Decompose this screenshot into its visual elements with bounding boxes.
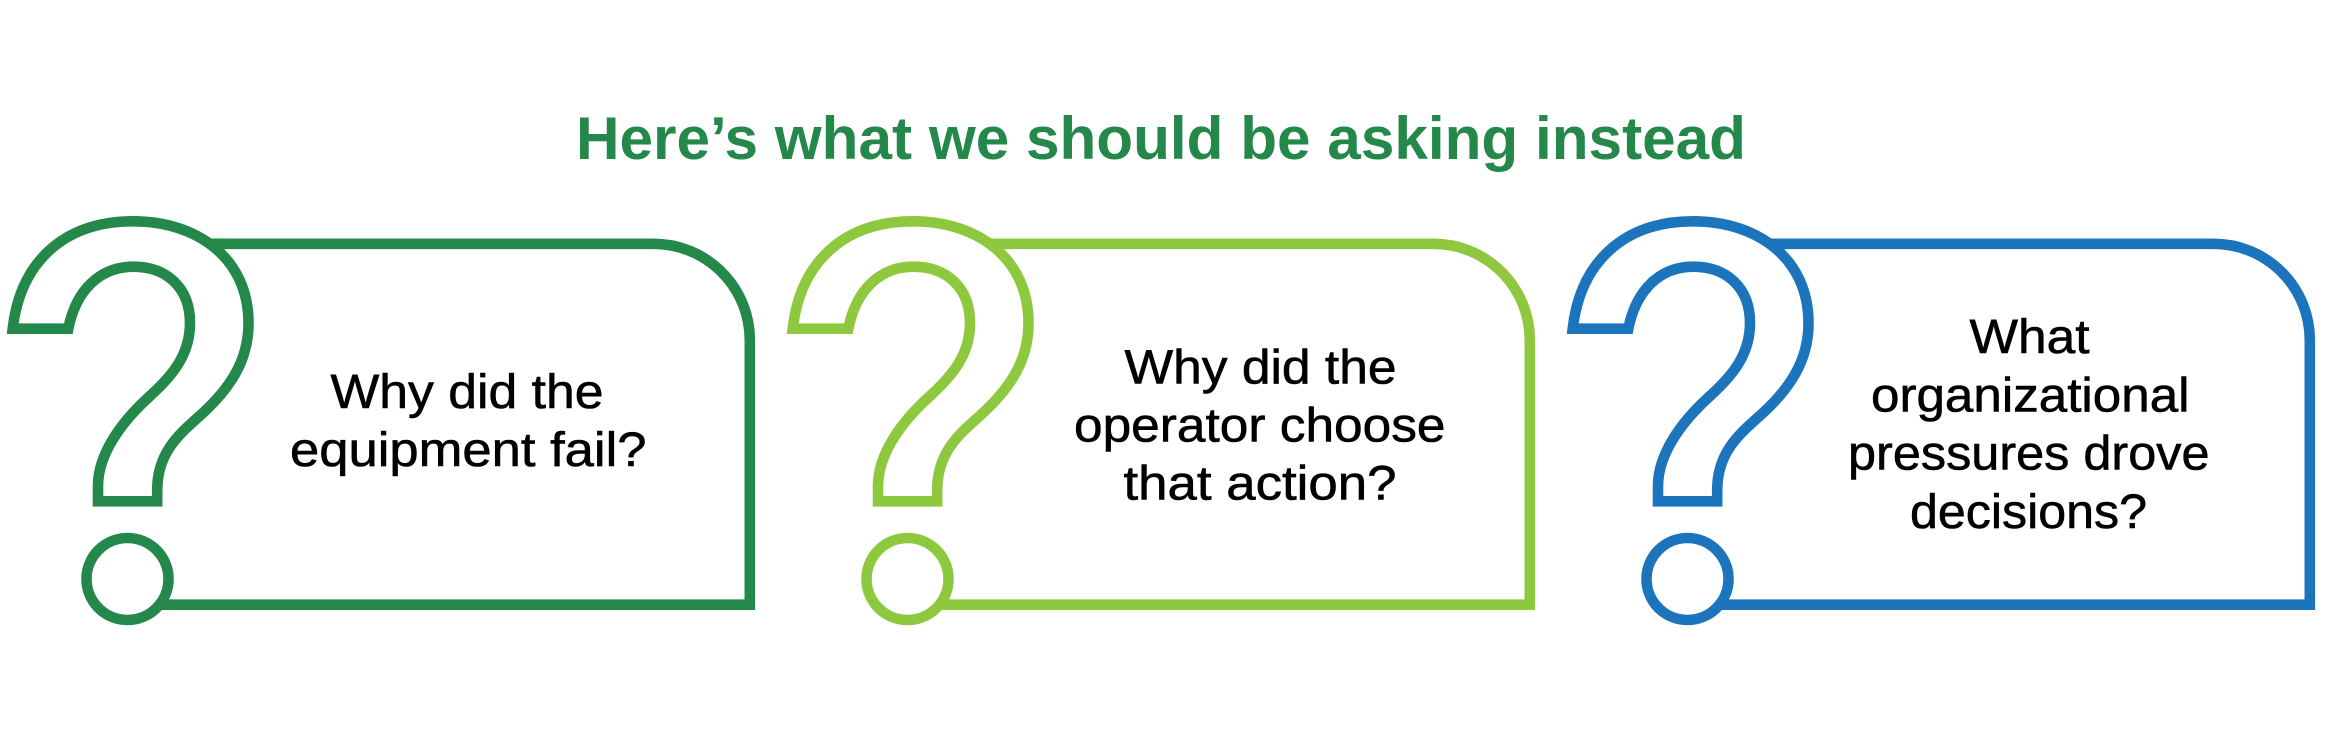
question text: What [1970,311,2090,364]
icon: question mark [13,221,249,620]
icon: question mark [793,221,1028,620]
question text: Why did the [1124,342,1396,394]
panel: operator question [793,221,1530,620]
icon: question mark [1573,221,1808,620]
question text: equipment fail? [290,424,646,477]
question text: decisions? [1910,486,2147,539]
speech box outline [1710,244,2310,605]
question text: organizational [1871,370,2190,422]
title: Here’s what we should be asking instead [576,105,1746,172]
question text: operator choose [1074,400,1446,452]
panel: equipment question [13,221,750,620]
panel: organizational question [1573,221,2310,620]
speech box outline [150,244,750,605]
question text: Why did the [330,366,604,419]
question text: that action? [1124,458,1396,510]
question text: pressures drove [1848,428,2210,480]
speech box outline [930,244,1530,605]
